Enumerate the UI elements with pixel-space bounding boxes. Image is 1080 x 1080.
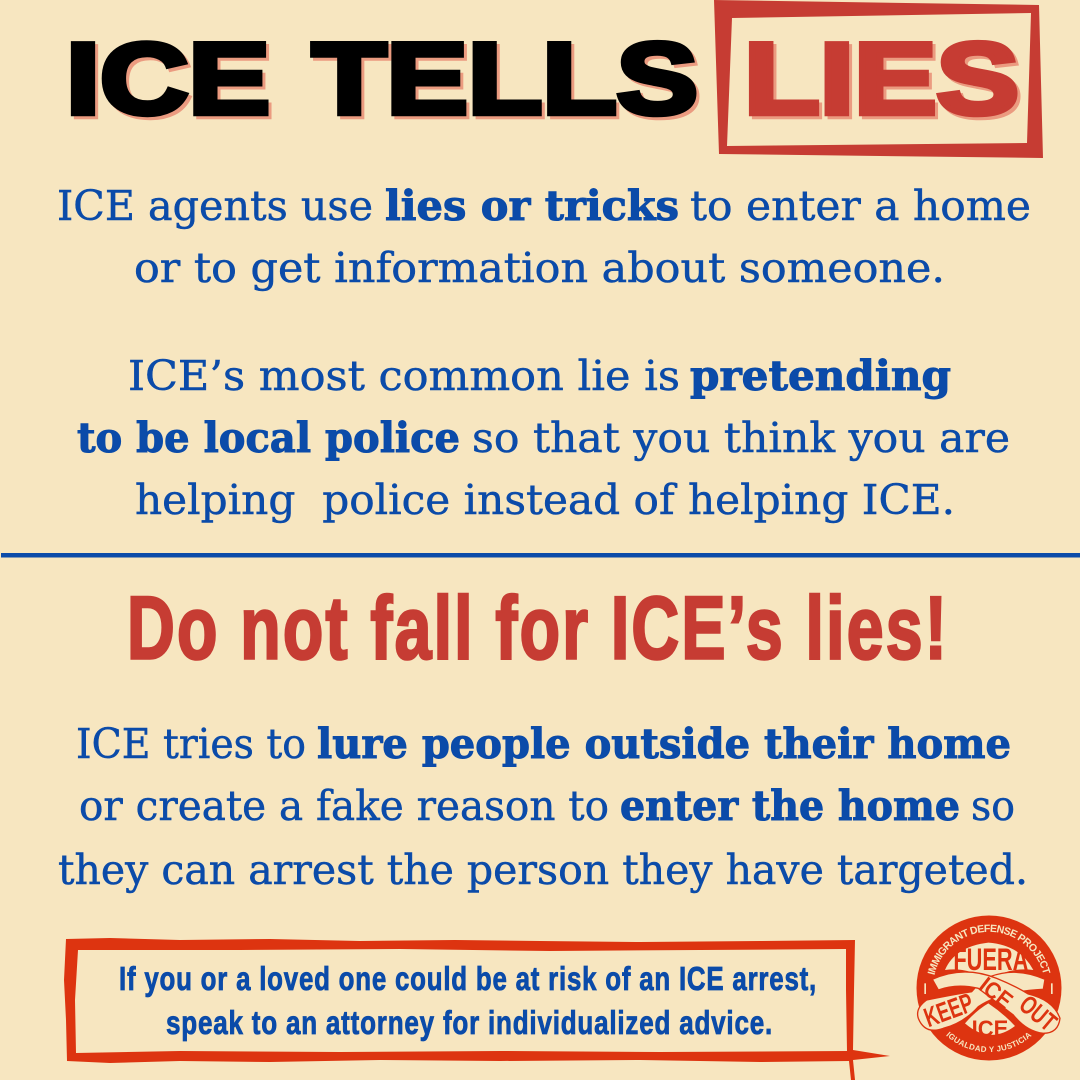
- text block: lure people outside: or create a fake reason to: [79, 782, 609, 830]
- callout text: If you or a loved one could be at risk of an ICE arrest,: [119, 960, 817, 997]
- callout: attorney advice: [64, 938, 890, 1080]
- logo artwork: OUT: [1013, 989, 1063, 1037]
- logo artwork: KEEP: [920, 987, 977, 1033]
- text block: pretending to be local police: pretending: [690, 352, 951, 400]
- stamp frame around LIES: [714, 0, 1043, 158]
- text block: lies or tricks: to enter a home: [690, 182, 1031, 230]
- text block: lies or tricks: [57, 182, 1031, 292]
- logo ring text: IMMIGRANT DEFENSE PROJECT: [928, 924, 1050, 975]
- logo ring text: IGUALDAD Y JUSTICIA: [946, 1032, 1032, 1052]
- text block: lure people outside: enter the home: [620, 782, 960, 830]
- text block: lure people outside: so: [971, 782, 1015, 830]
- text block: lies or tricks: ICE agents use: [57, 182, 373, 230]
- logo ring text: [928, 924, 1050, 1052]
- text block: lure people outside: ICE tries to: [76, 720, 306, 768]
- logo artwork: FUERA: [953, 941, 1028, 977]
- title: ICE TELLS LIES: LIES: [747, 24, 1022, 138]
- title: ICE TELLS LIES: [66, 22, 1022, 138]
- title: ICE TELLS LIES: LIES: [744, 22, 1019, 136]
- callout text: [119, 960, 817, 1041]
- text block: lure people outside: [58, 720, 1028, 894]
- text block: pretending to be local police: to be local police: [77, 414, 460, 462]
- text block: lies or tricks: lies or tricks: [385, 182, 679, 230]
- text block: pretending to be local police: helping police instead of helping ICE.: [135, 476, 955, 524]
- text block: pretending to be local police: so that you think you are: [472, 414, 1010, 462]
- callout text: speak to an attorney for individualized advice.: [166, 1004, 773, 1041]
- callout frame: [64, 938, 890, 1080]
- title: ICE TELLS LIES: ICE: [69, 24, 273, 138]
- title: ICE TELLS LIES: TELLS: [315, 24, 701, 138]
- text block: lure people outside: lure people outside their home: [317, 720, 1011, 768]
- title: ICE TELLS LIES: ICE: [66, 22, 270, 136]
- text block: pretending to be local police: [77, 352, 1010, 524]
- logo artwork: ICE: [972, 1016, 1008, 1042]
- title: ICE TELLS LIES: TELLS: [312, 22, 698, 136]
- logo artwork: [918, 941, 1063, 1042]
- logo artwork: ICE: [974, 972, 1018, 1014]
- text block: pretending to be local police: ICE’s most common lie is: [128, 352, 680, 400]
- text block: lure people outside: they can arrest the person they have targeted.: [58, 846, 1028, 894]
- text block: lies or tricks: or to get information about someone.: [134, 244, 945, 292]
- logo: Immigrant Defense Project, Keep ICE Out: [916, 916, 1063, 1060]
